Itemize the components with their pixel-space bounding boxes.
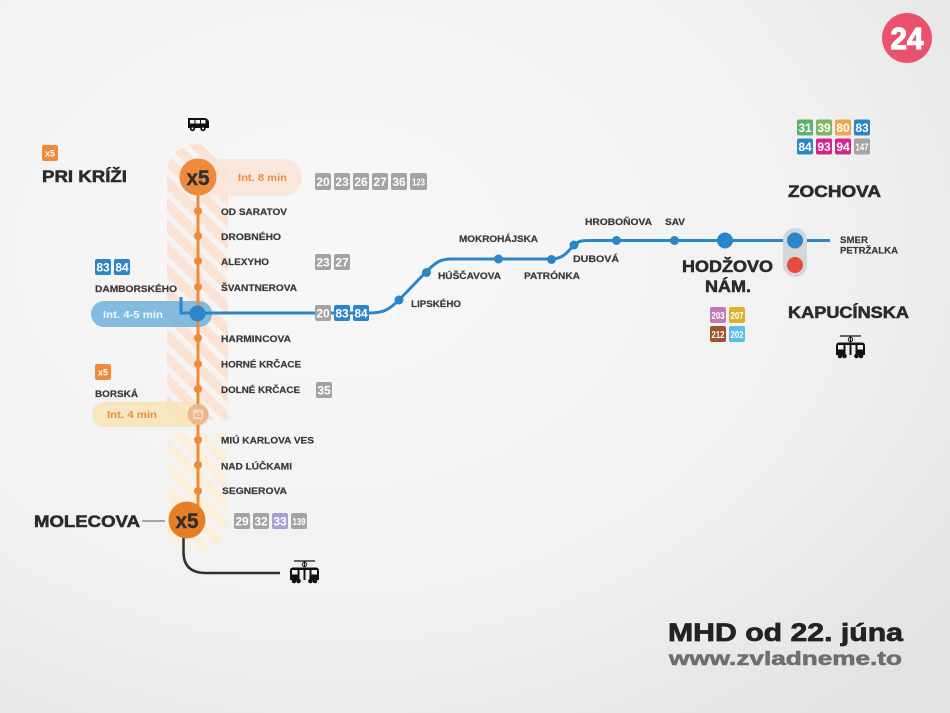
stop labels: orange line: ŠVANTNEROVA [221, 282, 297, 294]
logo: 24: 24 [890, 21, 924, 56]
badge: x5 Pri Kríži: x5 [45, 148, 55, 158]
station headings: ZOCHOVA [788, 182, 881, 201]
hatched band: x5 upper section [167, 144, 228, 420]
badges: Pri Kríži lines: 26 [354, 175, 368, 189]
badge: x5 Borská [95, 364, 111, 380]
blue line [181, 236, 830, 313]
stop labels: blue line: HROBOŇOVA [585, 216, 652, 228]
badges: Damborského 83 84: 84 [115, 260, 129, 274]
stop labels: orange line [95, 207, 314, 497]
badges: Zochova lines: 31 [798, 121, 812, 135]
footer text [668, 619, 904, 670]
badges: Alexyho 23 27: 27 [335, 256, 349, 270]
badges: Zochova lines: 39 [817, 121, 831, 135]
interval pill: 4-5 min: Int. 4-5 min [103, 310, 163, 321]
interval pill: 4 min: Int. 4 min [107, 410, 157, 421]
footer text: www.zvladneme.to [668, 649, 902, 670]
badges: Pri Kríži lines: 23 [335, 175, 349, 189]
station headings [34, 167, 909, 531]
stop: Damborského [190, 306, 206, 322]
stop labels: orange line: DROBNÉHO [221, 232, 281, 243]
station headings: PRI KRÍŽI [42, 167, 127, 186]
badges: Hodžovo nám. lines: 212 [712, 330, 725, 341]
badges: Alexyho 23 27: 23 [316, 256, 330, 270]
badges: Zochova lines: 147 [856, 142, 869, 154]
stop: Hodžovo nám. [717, 232, 733, 248]
badges: Molecova lines: 139 [292, 517, 306, 528]
badges: Damborského 83 84: 83 [96, 260, 110, 274]
stop labels: blue line: SMER [840, 235, 868, 246]
stop labels: orange line: DAMBORSKÉHO [95, 284, 177, 295]
badges: Molecova lines: 33 [273, 514, 287, 528]
stop labels: orange line: HORNÉ KRČACE [221, 358, 301, 370]
badges: Hodžovo nám. lines: 202 [730, 330, 744, 341]
badges: Zochova lines: 94 [836, 140, 850, 154]
stop labels: blue line: MOKROHÁJSKA [459, 234, 538, 245]
stop labels: blue line: PETRŽALKA [840, 244, 898, 256]
badges: Zochova lines: 83 [855, 121, 869, 135]
badges: Zochova lines: 93 [817, 140, 831, 154]
station headings: KAPUCÍNSKA [788, 303, 909, 322]
badges: Hodžovo nám. lines [710, 307, 745, 342]
badge: x5 Pri Kríži [42, 145, 58, 161]
badges: Damborského transfer 20 83 84 [315, 305, 369, 321]
logo: 24 [882, 13, 932, 63]
stop labels: orange line: HARMINCOVA [221, 334, 291, 345]
terminus: Pri Kríži x5: x5 [186, 167, 210, 190]
stop labels: blue line: PATRÓNKA [524, 270, 580, 282]
badges: Damborského 83 84 [95, 259, 130, 275]
badges: Zochova lines: 80 [836, 121, 850, 135]
badges: Damborského transfer 20 83 84: 84 [354, 306, 368, 320]
hatched band: x5 lower section [167, 433, 227, 552]
stop labels: blue line: DUBOVÁ [573, 254, 619, 265]
badges: Pri Kríži lines [315, 173, 427, 190]
stop labels: orange line: MIÚ KARLOVA VES [221, 434, 314, 446]
badges: Molecova lines [234, 513, 307, 529]
badges: Alexyho 23 27 [315, 254, 350, 270]
stop labels: blue line: LIPSKÉHO [411, 299, 461, 310]
terminus: Pri Kríži x5 [180, 158, 216, 196]
footer text: MHD od 22. júna [668, 619, 904, 647]
badges: Hodžovo nám. lines: 207 [730, 311, 744, 322]
black line to tram terminus [184, 538, 280, 573]
badges: Pri Kríži lines: 20 [316, 175, 330, 189]
stop labels: orange line: NAD LÚČKAMI [221, 460, 292, 472]
stop labels: blue line: HÚŠČAVOVA [438, 270, 501, 282]
icon: tram at Molecova [290, 561, 319, 583]
icon: tram at Kapucínska [836, 336, 865, 358]
station pair: Zochova and Kapucínska [783, 228, 807, 277]
badges: Hodžovo nám. lines: 203 [712, 311, 725, 322]
badges: Molecova lines: 29 [235, 514, 249, 528]
stop labels: blue line [411, 216, 898, 310]
terminus: Molecova x5: x5 [176, 510, 199, 533]
badges: Damborského transfer 20 83 84: 20 [316, 306, 330, 320]
interval pill: 8 min [190, 159, 302, 196]
Molecova leader line [142, 520, 165, 522]
badges: Pri Kríži lines: 36 [392, 175, 406, 189]
badges: Zochova lines: 84 [798, 140, 812, 154]
orange line x5 [194, 177, 202, 510]
stop labels: orange line: OD SARATOV [221, 207, 288, 218]
badges: Pri Kríži lines: 27 [373, 175, 387, 189]
station headings: NÁM. [705, 277, 751, 296]
icon: trolleybus [188, 118, 209, 131]
stop labels: orange line: ALEXYHO [221, 257, 269, 268]
interval pill: 4-5 min [91, 301, 212, 327]
badges: Zochova lines [797, 120, 870, 154]
badges: Molecova lines: 32 [254, 514, 268, 528]
stop: Borská [188, 404, 208, 425]
stop labels: blue line: SAV [665, 217, 686, 228]
badge: Dolné Krčace 35: 35 [317, 384, 331, 398]
stop: Borská: x5 [194, 412, 202, 419]
interval pill: 8 min: Int. 8 min [238, 173, 287, 184]
stop labels: orange line: DOLNÉ KRČACE [221, 384, 300, 396]
station headings: HODŽOVO [682, 257, 773, 276]
badges: Damborského transfer 20 83 84: 83 [335, 306, 349, 320]
stop labels: orange line: SEGNEROVA [222, 486, 287, 497]
badge: x5 Borská: x5 [98, 368, 108, 378]
station headings: MOLECOVA [34, 512, 140, 531]
terminus: Molecova x5 [168, 502, 206, 538]
badges: Pri Kríži lines: 123 [412, 178, 425, 188]
interval pill: 4 min [92, 402, 209, 427]
stop labels: orange line: BORSKÁ [95, 389, 138, 400]
